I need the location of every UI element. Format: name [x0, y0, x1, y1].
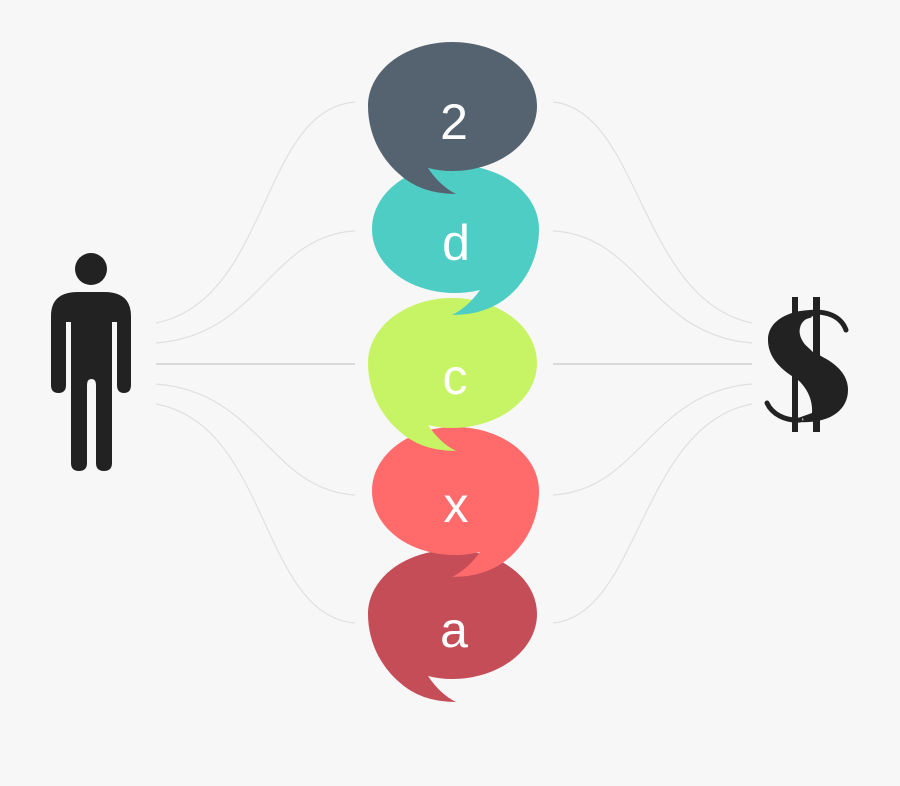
- bubble: a: a: [440, 602, 468, 658]
- icon: person: [51, 253, 131, 471]
- icon: dollar sign: $: [765, 284, 849, 450]
- bubble: d: d: [442, 215, 470, 271]
- connectors: person to bubbles: [156, 102, 355, 623]
- bubble: x: [372, 427, 539, 577]
- bubble: c: [368, 298, 537, 451]
- connectors: bubbles to dollar: [553, 102, 752, 623]
- bubble: 2: [368, 42, 537, 194]
- bubble: a: [368, 550, 537, 702]
- bubble: 2: 2: [440, 94, 468, 150]
- bubble: c: c: [442, 349, 468, 405]
- bubble: d: [372, 165, 539, 315]
- bubble: x: x: [444, 477, 468, 533]
